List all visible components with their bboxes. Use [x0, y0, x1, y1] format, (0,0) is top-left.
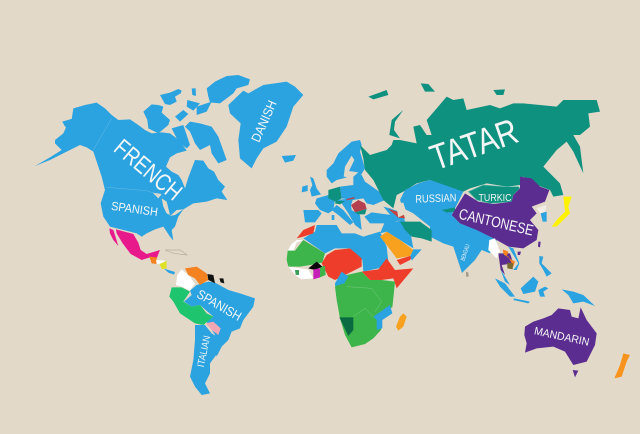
region: Iran	[400, 222, 432, 242]
region: Niger and Nigeria	[322, 248, 362, 280]
region: Laos	[503, 249, 515, 267]
label: MANDARIN: MANDARIN	[533, 325, 590, 349]
region: Ecuador Peru Bolivia	[169, 287, 213, 325]
region: Central and Southern Africa	[335, 272, 395, 347]
region: Central America	[149, 257, 175, 275]
region: Guyana and French Guiana	[207, 274, 224, 283]
region: New Zealand	[614, 353, 630, 378]
Africa borders	[347, 287, 382, 312]
region: Mongolia	[468, 185, 520, 203]
labels	[109, 98, 590, 368]
panel: Asia	[360, 83, 600, 273]
region: Australia	[524, 307, 597, 365]
label: BENGALI: BENGALI	[461, 243, 472, 262]
label: RUSSIAN: RUSSIAN	[415, 192, 457, 206]
region: Indonesia and Philippines	[495, 256, 595, 306]
region: Sierra Leone	[295, 270, 299, 275]
region: Middle East	[380, 220, 413, 248]
region: Cameroon	[335, 272, 348, 286]
region: Brazil and Guianas	[184, 282, 255, 357]
region: Japan	[552, 197, 572, 227]
region: West Sahel	[287, 240, 325, 267]
Great Lakes	[153, 193, 183, 216]
region: Colombia	[176, 269, 195, 291]
region: Korea	[537, 205, 547, 222]
region: Western Sahara	[288, 240, 303, 251]
region: Benin	[313, 268, 320, 279]
region: Kyrgyzstan	[442, 207, 455, 213]
region: Yemen	[397, 255, 413, 265]
region: Mexico	[109, 228, 160, 260]
region: Central and South Asia	[400, 180, 497, 273]
region: Caspian Sea	[396, 203, 407, 217]
label: FRENCH: FRENCH	[109, 134, 187, 206]
panel: Southeast Asia and Oceania	[466, 238, 630, 378]
label: SPANISH (Brazil): SPANISH	[194, 286, 244, 324]
region: Arctic islands	[62, 75, 296, 163]
region: Germany	[328, 187, 342, 202]
panel: Europe	[302, 140, 405, 230]
region: Cambodia	[507, 263, 513, 269]
region: Paraguay	[206, 322, 221, 335]
label: DANISH: DANISH	[248, 98, 280, 144]
region: Slovakia	[347, 197, 354, 200]
region: Greenland	[228, 82, 303, 168]
region: Romania	[351, 200, 367, 212]
region: Horn of Africa	[362, 258, 413, 288]
region: Bulgaria	[355, 209, 367, 214]
region: Europe blue countries	[302, 140, 405, 230]
region: Austria	[335, 201, 345, 204]
region: Russia	[360, 97, 600, 208]
region: Southern Cone	[190, 325, 220, 395]
region: Canada and USA	[35, 103, 227, 241]
Caribbean outlines	[165, 250, 187, 255]
label: ITALIAN: ITALIAN	[196, 335, 213, 368]
region: Venezuela	[185, 267, 208, 285]
region: Madagascar	[396, 313, 407, 331]
region: Morocco	[297, 225, 315, 238]
region: West Africa coast	[288, 267, 313, 279]
panel: Latin America	[109, 228, 255, 395]
region: Saudi Arabia	[380, 232, 413, 258]
panel: North America	[35, 75, 303, 241]
region: Baltic Sea	[344, 156, 358, 178]
label: CANTONESE: CANTONESE	[457, 206, 535, 239]
label: TURKIC: TURKIC	[478, 193, 512, 204]
region: Caucasus	[388, 209, 405, 218]
region: Togo	[320, 266, 326, 277]
region: Tasmania	[573, 370, 578, 377]
label: SPANISH (USA): SPANISH	[110, 199, 159, 219]
region: Burkina Faso	[308, 262, 322, 270]
panel: Africa and Arabia	[287, 220, 422, 347]
region: Oman	[410, 249, 422, 261]
region: China	[452, 177, 549, 248]
region: North Africa	[303, 225, 388, 272]
borders	[93, 118, 112, 150]
label: TATAR: TATAR	[425, 110, 523, 178]
region: Myanmar	[488, 238, 500, 258]
region: Vietnam	[508, 247, 519, 270]
region: Hainan and Sri Lanka	[466, 242, 541, 277]
region: Thailand	[498, 253, 513, 275]
region: Namibia	[339, 317, 353, 336]
region: Arctic Russia islands	[368, 83, 505, 138]
region: Tanzania and Mozambique	[373, 305, 392, 330]
